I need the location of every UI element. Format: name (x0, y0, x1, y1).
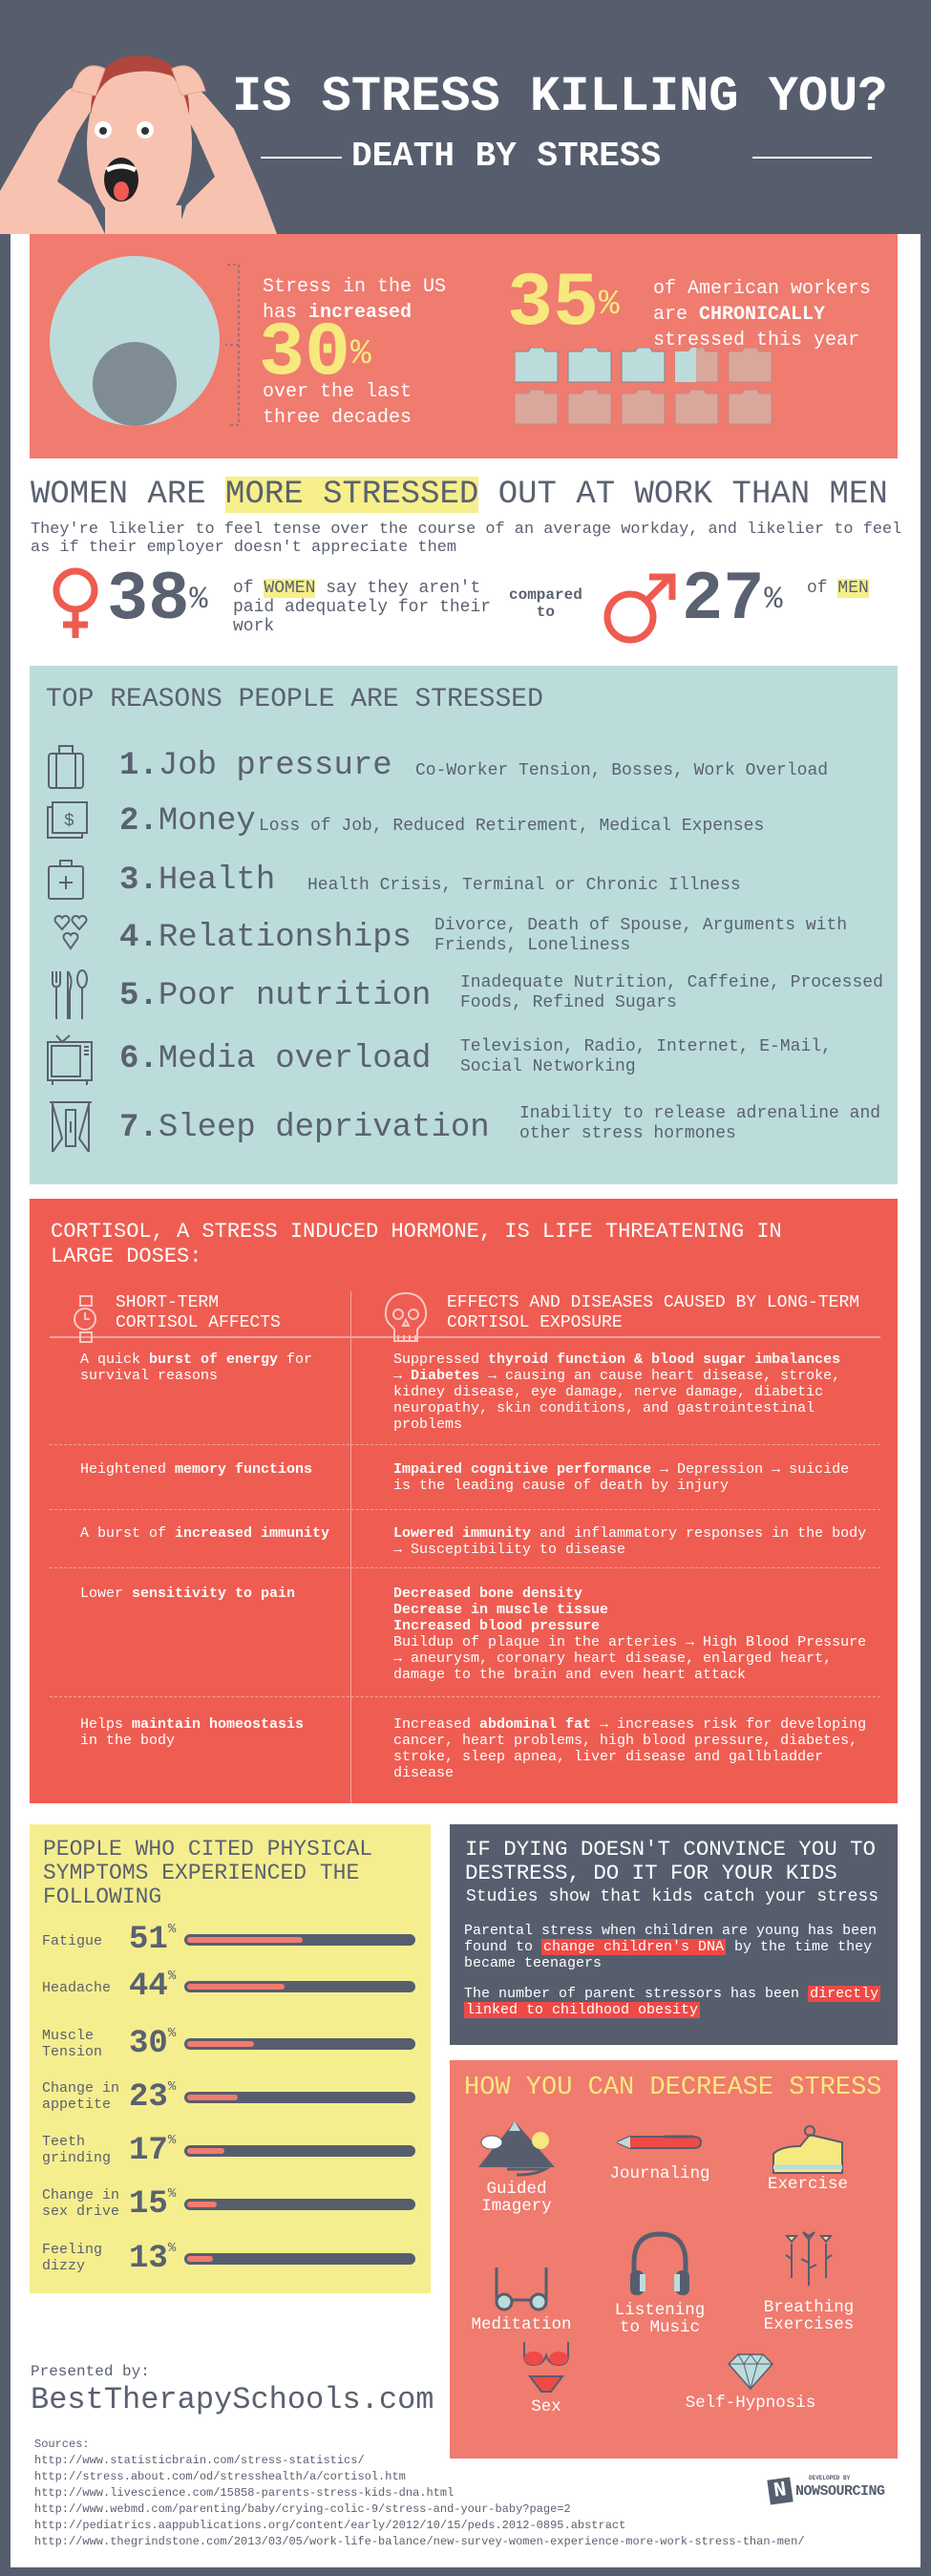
text: sources: http://www.livescience.com/15858-parents-stress-kids-dna.html (34, 2486, 454, 2500)
stat: 30%: has increased (263, 302, 412, 324)
bar chart: symptoms: Teeth (42, 2134, 85, 2150)
reason 5 (52, 969, 883, 1019)
item: exercise: Exercise (768, 2175, 848, 2194)
bar chart: symptoms: 30% (129, 2026, 176, 2062)
panel: decrease stress (450, 2060, 898, 2459)
icon: briefcase (48, 745, 84, 789)
row 5: Helps maintain homeostasis (80, 1716, 304, 1733)
text: presented by: Presented by: (31, 2363, 150, 2380)
item: listening to music (603, 2230, 717, 2331)
text: kids facts: Parental stress when children are young has been (464, 1923, 877, 1939)
illustration: stressed man (0, 55, 277, 234)
row 1 (80, 1352, 312, 1384)
reason 3: Health Crisis, Terminal or Chronic Illness (307, 876, 741, 895)
panel: cortisol: disease (393, 1765, 454, 1781)
bar chart: symptoms: Fatigue (42, 1933, 102, 1949)
bar chart: symptoms: dizzy (42, 2258, 85, 2274)
bar chart: symptoms: appetite (42, 2097, 111, 2113)
heading: decrease: HOW YOU CAN DECREASE STRESS (464, 2074, 881, 2102)
reason 2: Loss of Job, Reduced Retirement, Medical Expenses (259, 817, 764, 836)
icon: tv (47, 1034, 93, 1085)
subtitle: DEATH BY STRESS (351, 137, 661, 176)
heading: kids: DESTRESS, DO IT FOR YOUR KIDS (465, 1861, 837, 1885)
reason 7: Inability to release adrenaline and (519, 1104, 880, 1123)
item: journaling (603, 2132, 717, 2189)
reason 3 (48, 860, 741, 900)
stat: 27% men: 27% (682, 561, 783, 639)
bar chart: symptoms: Feeling (42, 2242, 102, 2258)
reason 4: Divorce, Death of Spouse, Arguments with (434, 916, 847, 935)
panel: cortisol: neuropathy, skin conditions, and gastrointestinal (393, 1400, 815, 1416)
item: self-hypnosis (674, 2352, 827, 2419)
bar chart: symptoms: 13% (129, 2241, 176, 2277)
heading: kids (465, 1838, 876, 1885)
text: sources: http://stress.about.com/od/stresshealth/a/cortisol.htm (34, 2470, 406, 2483)
panel: stress stats: 30% (259, 310, 371, 397)
heading: kids: IF DYING DOESN'T CONVINCE YOU TO (465, 1837, 876, 1862)
bar chart: symptoms: Headache (42, 1980, 111, 1996)
panel: stress stats: of American workers (653, 278, 871, 300)
item: breathing exercises: Exercises (764, 2315, 854, 2334)
reason 6: Social Networking (460, 1057, 636, 1076)
reason 2: 2.Money (119, 803, 256, 840)
bar chart: symptoms: Tension (42, 2044, 102, 2060)
panel: top reasons (30, 666, 898, 1184)
item: sex: Sex (531, 2397, 561, 2416)
text: women intro: as if their employer doesn't appreciate them (31, 539, 456, 557)
item: journaling: Journaling (609, 2164, 710, 2183)
chart: folders (515, 348, 772, 424)
heading: women more stressed: WOMEN ARE MORE STRESSED OUT AT WORK THAN MEN (31, 477, 888, 513)
column divider (350, 1291, 351, 1803)
bar chart: symptoms: 23% (129, 2079, 176, 2116)
text: compared to (509, 586, 582, 621)
stat: 30%: Stress in the US (263, 276, 446, 298)
item: listening to music: Listening (615, 2301, 705, 2320)
reason 7: other stress hormones (519, 1124, 736, 1143)
icon: medical kit (48, 860, 84, 900)
row 1: A quick burst of energy for (80, 1352, 312, 1368)
stat: 35%: 35% (507, 261, 620, 348)
title: IS STRESS KILLING YOU? (232, 69, 888, 125)
heading: symptoms: FOLLOWING (43, 1884, 161, 1909)
reason 1: Co-Worker Tension, Bosses, Work Overload (415, 761, 828, 780)
icon: window curtains (50, 1101, 92, 1152)
item: guided imagery (474, 2119, 560, 2215)
item: breathing exercises (755, 2230, 862, 2326)
heading: cortisol: LARGE DOSES: (51, 1245, 201, 1268)
panel: kids: Studies show that kids catch your stress (466, 1887, 878, 1906)
panel: cortisol: problems (393, 1416, 462, 1433)
row 5: in the body (80, 1733, 175, 1749)
panel: kids: The number of parent stressors has been directly (464, 1986, 878, 2002)
reason 7 (50, 1101, 880, 1152)
panel: cortisol: → aneurysm, coronary heart disease, enlarged heart, (393, 1650, 832, 1667)
reason 6: 6.Media overload (119, 1041, 431, 1077)
text: presented by: BestTherapySchools.com (31, 2382, 434, 2417)
reason 4: 4.Relationships (119, 920, 412, 956)
reason 2 (47, 801, 764, 840)
heading: symptoms: SYMPTOMS EXPERIENCED THE (43, 1861, 359, 1885)
icon: skull (384, 1292, 428, 1342)
text: sources: Sources: (34, 2438, 90, 2451)
text: work (233, 617, 274, 636)
bar chart: symptoms: 44% (129, 1969, 176, 2005)
panel: cortisol: stroke, sleep apnea, liver disease and gallbladder (393, 1749, 823, 1765)
text: sources: http://pediatrics.aappublications.org/content/early/2012/10/15/peds.2012-0895.abstract (34, 2519, 625, 2532)
text: sources: http://www.statisticbrain.com/stress-statistics/ (34, 2454, 365, 2467)
panel: cortisol: Buildup of plaque in the arteries → High Blood Pressure (393, 1634, 866, 1650)
text: of MEN (807, 579, 869, 598)
panel: cortisol: Decrease in muscle tissue (393, 1602, 608, 1618)
heading: cortisol: CORTISOL, A STRESS INDUCED HORMONE, IS LIFE THREATENING IN (51, 1220, 782, 1244)
text: sources: http://www.webmd.com/parenting/baby/crying-colic-9/stress-and-your-baby?page=2 (34, 2502, 571, 2516)
heading: symptoms (43, 1837, 372, 1909)
text: paid adequately for their (233, 598, 491, 617)
heading: top reasons: TOP REASONS PEOPLE ARE STRESSED (46, 685, 543, 714)
panel: cortisol: Increased abdominal fat → increases risk for developing (393, 1716, 866, 1733)
text: kids facts: found to change children's DNA by the time they (464, 1939, 872, 1955)
column header: long-term (384, 1292, 859, 1342)
icon: male (603, 573, 676, 644)
text: sources: http://www.thegrindstone.com/2013/03/05/work-life-balance/new-survey-women-experience-more-work-stress-than-men/ (34, 2535, 805, 2548)
reason 3: 3.Health (119, 862, 275, 899)
logo: nowsourcing: DEVELOPED BY (809, 2475, 850, 2481)
item: listening to music: to Music (620, 2318, 700, 2337)
heading: symptoms: PEOPLE WHO CITED PHYSICAL (43, 1837, 372, 1862)
logo: nowsourcing (769, 2475, 895, 2505)
panel: cortisol (30, 1199, 898, 1803)
column header: short-term: SHORT-TERM (116, 1293, 219, 1312)
column header: long-term: EFFECTS AND DISEASES CAUSED BY LONG-TERM (447, 1293, 859, 1312)
item: guided imagery: Imagery (481, 2197, 552, 2216)
panel: cortisol: kidney disease, eye damage, nerve damage, diabetic (393, 1384, 823, 1400)
logo: nowsourcing: N (772, 2478, 788, 2503)
panel: stress stats: stressed this year (653, 330, 859, 351)
column header: long-term: CORTISOL EXPOSURE (447, 1313, 623, 1332)
icon: cutlery (52, 969, 88, 1019)
panel: physical symptoms (30, 1824, 431, 2293)
bar chart: symptoms: 17% (129, 2133, 176, 2169)
reason 6: Television, Radio, Internet, E-Mail, (460, 1037, 832, 1056)
panel: cortisol: Suppressed thyroid function & blood sugar imbalances (393, 1352, 840, 1368)
icon: female (53, 567, 97, 638)
reason 7: 7.Sleep deprivation (119, 1110, 490, 1146)
text: compared to: to (537, 604, 555, 621)
reason 5: 5.Poor nutrition (119, 978, 431, 1014)
reason 1: 1.Job pressure (119, 748, 392, 784)
row 4: Lower sensitivity to pain (80, 1586, 295, 1602)
chart: growth circles (50, 256, 220, 426)
text: of WOMEN say they aren't (233, 579, 480, 598)
text: sources (34, 2437, 805, 2550)
panel: cortisol: damage to the brain and even heart attack (393, 1667, 746, 1683)
bar chart: symptoms: grinding (42, 2150, 111, 2166)
panel: stress stats: three decades (263, 407, 412, 429)
row 5 (80, 1716, 304, 1749)
panel: stress stats: over the last (263, 381, 412, 403)
panel: cortisol: → Susceptibility to disease (393, 1542, 625, 1558)
logo: nowsourcing: NOWSOURCING (795, 2483, 885, 2500)
panel: cortisol: → Diabetes → causing an cause heart disease, stroke, (393, 1368, 840, 1384)
panel: cortisol: Decreased bone density (393, 1586, 582, 1602)
reason 5: Foods, Refined Sugars (460, 993, 677, 1012)
bar chart: symptoms (42, 1922, 415, 2277)
text: presented by (31, 2363, 432, 2432)
panel: stress stats: are CHRONICALLY (653, 304, 825, 326)
text: compared to: compared (509, 586, 582, 604)
column header: short-term (74, 1293, 281, 1343)
icon: money: $ (64, 812, 74, 831)
bar chart: symptoms: 51% (129, 1922, 176, 1958)
panel: cortisol: is the leading cause of death by injury (393, 1478, 729, 1494)
heading: cortisol (51, 1220, 782, 1268)
item: guided imagery: Guided (486, 2180, 546, 2199)
row 2: Heightened memory functions (80, 1461, 312, 1478)
icon: hearts (53, 915, 88, 950)
item: meditation (469, 2266, 574, 2323)
item: sex (517, 2340, 576, 2421)
text: kids facts: became teenagers (464, 1955, 602, 1971)
stat: 30% (263, 276, 446, 324)
bracket (225, 264, 239, 426)
panel: decrease stress: Meditation (471, 2315, 572, 2334)
column header: short-term: CORTISOL AFFECTS (116, 1313, 281, 1332)
panel: kids (450, 1824, 898, 2045)
panel: cortisol: Lowered immunity and inflammatory responses in the body (393, 1525, 866, 1542)
icon: money (47, 801, 88, 839)
panel: stress stats (30, 234, 898, 458)
reason 5: Inadequate Nutrition, Caffeine, Processed (460, 973, 883, 992)
reason 4 (53, 915, 847, 956)
text: kids facts (464, 1923, 877, 1971)
row 1: survival reasons (80, 1368, 218, 1384)
reason 4: Friends, Loneliness (434, 936, 630, 955)
text: women intro (31, 521, 901, 557)
header band (0, 0, 931, 234)
row 3: A burst of increased immunity (80, 1525, 329, 1542)
item: exercise (760, 2125, 856, 2202)
panel: cortisol: Impaired cognitive performance → Depression → suicide (393, 1461, 849, 1478)
panel: cortisol: cancer, heart problems, high blood pressure, diabetes, (393, 1733, 857, 1749)
bar chart: symptoms: Muscle (42, 2028, 94, 2044)
panel: cortisol: Increased blood pressure (393, 1618, 600, 1634)
text: women intro: They're likelier to feel tense over the course of an average workday, and likelier to feel (31, 521, 901, 539)
panel: kids: linked to childhood obesity (466, 2002, 698, 2018)
icon: watch (74, 1295, 96, 1343)
bar chart: symptoms: sex drive (42, 2203, 119, 2220)
reason 1 (48, 745, 828, 789)
reason 6 (47, 1034, 832, 1085)
item: self-hypnosis: Self-Hypnosis (686, 2394, 815, 2413)
bar chart: symptoms: Change in (42, 2080, 119, 2097)
stat: 38% women: 38% (107, 561, 208, 639)
item: breathing exercises: Breathing (764, 2298, 854, 2317)
bar chart: symptoms: 15% (129, 2186, 176, 2223)
bar chart: symptoms: Change in (42, 2187, 119, 2203)
